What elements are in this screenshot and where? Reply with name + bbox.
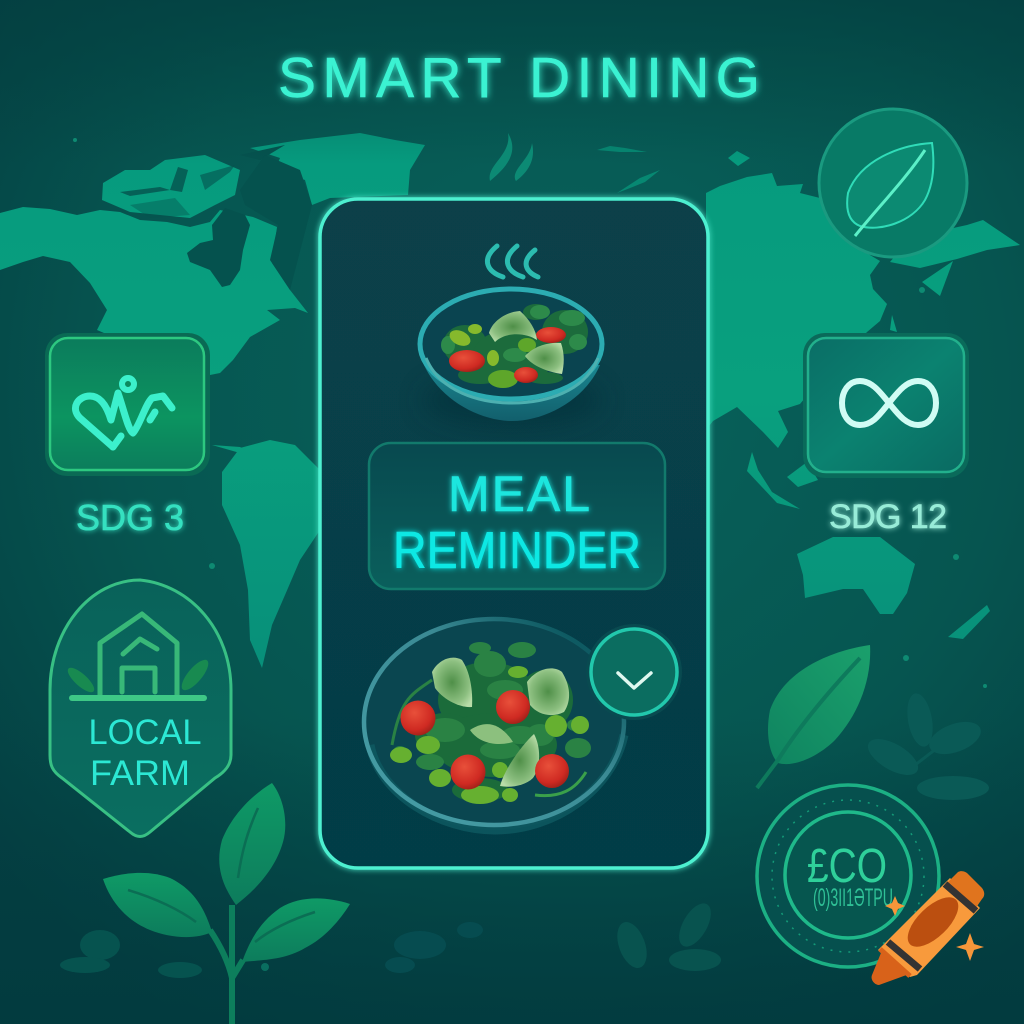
meal reminder label [369, 443, 665, 589]
icon: infinity [842, 381, 936, 425]
plant: faint bottom right [612, 898, 721, 972]
label: SDG 12: SDG 12 [829, 498, 947, 536]
background steam [490, 133, 533, 181]
panel: SDG 12 [803, 333, 969, 478]
New Zealand [948, 605, 990, 639]
Russia north islands [728, 151, 750, 166]
plant: dark sprig [862, 691, 989, 800]
North America [0, 207, 308, 376]
South America [222, 440, 320, 668]
panel: phone card [320, 199, 708, 868]
icon: health figure [75, 378, 172, 447]
East Russia [890, 220, 1020, 268]
Arctic islands [102, 155, 240, 218]
heading: reminder: REMINDER [393, 522, 641, 580]
Eurasia [706, 173, 887, 448]
badge: eco stamp [757, 785, 939, 967]
heading: meal: MEAL [448, 466, 590, 522]
icon: sparkle large [956, 933, 984, 961]
icon: bowl of salad [420, 289, 602, 428]
icon: check button [586, 624, 682, 720]
decorative dots [73, 138, 987, 971]
title: SMART DINING [278, 46, 760, 110]
Japan and Korea [922, 261, 953, 296]
icon: farm house [72, 614, 204, 698]
badge: local farm [50, 580, 231, 836]
label: SDG 3: SDG 3 [76, 497, 184, 538]
Hudson Bay and land holes [120, 145, 312, 290]
icon: salad plate [363, 618, 625, 830]
panel: SDG 3 [45, 333, 210, 476]
icon: crayon [872, 871, 984, 985]
plant: faint bottom centre [385, 922, 483, 973]
plant: bottom left seedling [103, 783, 350, 1024]
leaf: bottom right [757, 645, 870, 788]
icon: side leaves [64, 656, 213, 696]
SE Asia [747, 452, 800, 509]
label: farm: FARM [90, 754, 190, 793]
label: eco: £CO [807, 840, 887, 893]
icon: leaf badge [819, 109, 967, 257]
icon: sparkle small [885, 896, 905, 916]
Central America islands [212, 445, 262, 458]
icon: steam [487, 246, 538, 277]
label: local: LOCAL [88, 713, 202, 752]
Australia [797, 537, 915, 614]
label: eco subtext: (0)3II1ƏTPU [813, 884, 893, 912]
world map [0, 133, 1020, 668]
Greenland [250, 133, 425, 205]
plant: faint bottom left [60, 930, 202, 978]
